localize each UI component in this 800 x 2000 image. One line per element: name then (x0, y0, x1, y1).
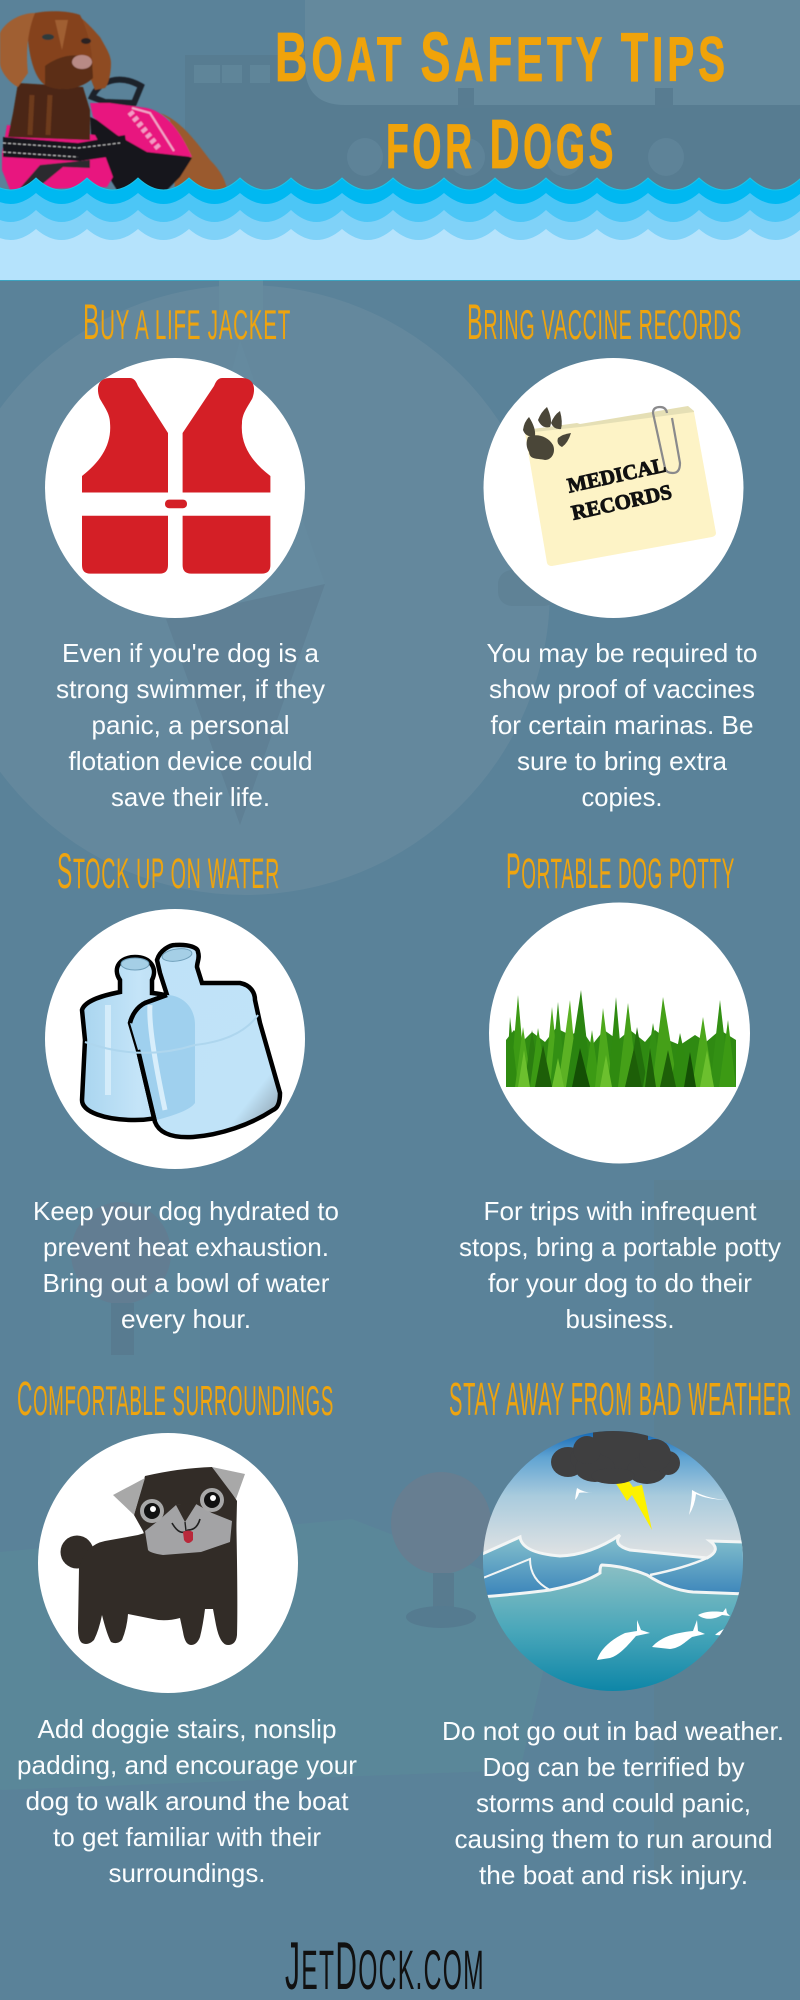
text: bad weather: causing them to run around (454, 1824, 772, 1854)
text: water (33, 1196, 339, 1334)
icon: water bottles (45, 909, 305, 1169)
icon: grass (489, 902, 750, 1164)
text: surroundings: padding, and encourage your (17, 1750, 357, 1780)
icon: medical records folder (484, 358, 744, 618)
text: COMFORTABLE SURROUNDINGS (17, 1373, 334, 1426)
icon: life jacket (45, 358, 305, 618)
photo: dog in pink life vest (0, 11, 227, 190)
panel: water (33, 843, 339, 1334)
text: water: prevent heat exhaustion. (43, 1232, 329, 1262)
text: surroundings (17, 1714, 357, 1888)
icon: medical records folder: RECORDS (569, 479, 674, 525)
text: surroundings: dog to walk around the boat (26, 1786, 349, 1816)
text: water: Bring out a bowl of water (42, 1268, 330, 1298)
text: bad weather: the boat and risk injury. (479, 1860, 748, 1890)
title: BOAT SAFETY TIPS (275, 18, 729, 96)
text: vaccine records: show proof of vaccines (489, 674, 755, 704)
panel: water: STOCK UP ON WATER (57, 843, 280, 899)
text: life jacket (56, 638, 325, 812)
text: dog potty: business. (566, 1304, 674, 1334)
text: life jacket: Even if you're dog is a (62, 638, 320, 668)
text: water: every hour. (121, 1304, 251, 1334)
text: dog potty (459, 1196, 781, 1334)
text: life jacket: flotation device could (68, 746, 312, 776)
panel: bad weather (442, 1373, 792, 1890)
text: surroundings: to get familiar with their (53, 1822, 321, 1852)
text: vaccine records: copies. (582, 782, 662, 812)
icon: cartoon pug (38, 1433, 298, 1693)
text: life jacket: save their life. (111, 782, 270, 812)
text: surroundings: Add doggie stairs, nonslip (38, 1714, 336, 1744)
text: vaccine records: sure to bring extra (517, 746, 728, 776)
icon: storm at sea (480, 1428, 745, 1695)
text: surroundings: surroundings. (108, 1858, 266, 1888)
text: bad weather: Do not go out in bad weather. (442, 1716, 784, 1746)
text: water: Keep your dog hydrated to (33, 1196, 339, 1226)
text: vaccine records (486, 638, 758, 812)
icon: medical records folder: MEDICAL (565, 453, 668, 498)
text: life jacket: strong swimmer, if they (56, 674, 325, 704)
panel: dog potty (459, 843, 781, 1334)
heading: life jacket: BUY A LIFE JACKET (83, 294, 291, 350)
panel: life jacket (45, 294, 325, 812)
text: bad weather (442, 1716, 784, 1890)
text: bad weather: Dog can be terrified by (482, 1752, 744, 1782)
text: bad weather: storms and could panic, (476, 1788, 751, 1818)
title: FOR DOGS (386, 105, 617, 183)
text: dog potty: stops, bring a portable potty (459, 1232, 781, 1262)
panel: surroundings (17, 1373, 357, 1888)
waves (0, 178, 800, 280)
text: life jacket: panic, a personal (92, 710, 290, 740)
text: dog potty: for your dog to do their (488, 1268, 752, 1298)
text: vaccine records: You may be required to (486, 638, 758, 668)
text: dog potty: For trips with infrequent (484, 1196, 757, 1226)
panel: vaccine records (467, 294, 758, 812)
title (275, 18, 729, 183)
text: vaccine records: for certain marinas. Be (490, 710, 754, 740)
